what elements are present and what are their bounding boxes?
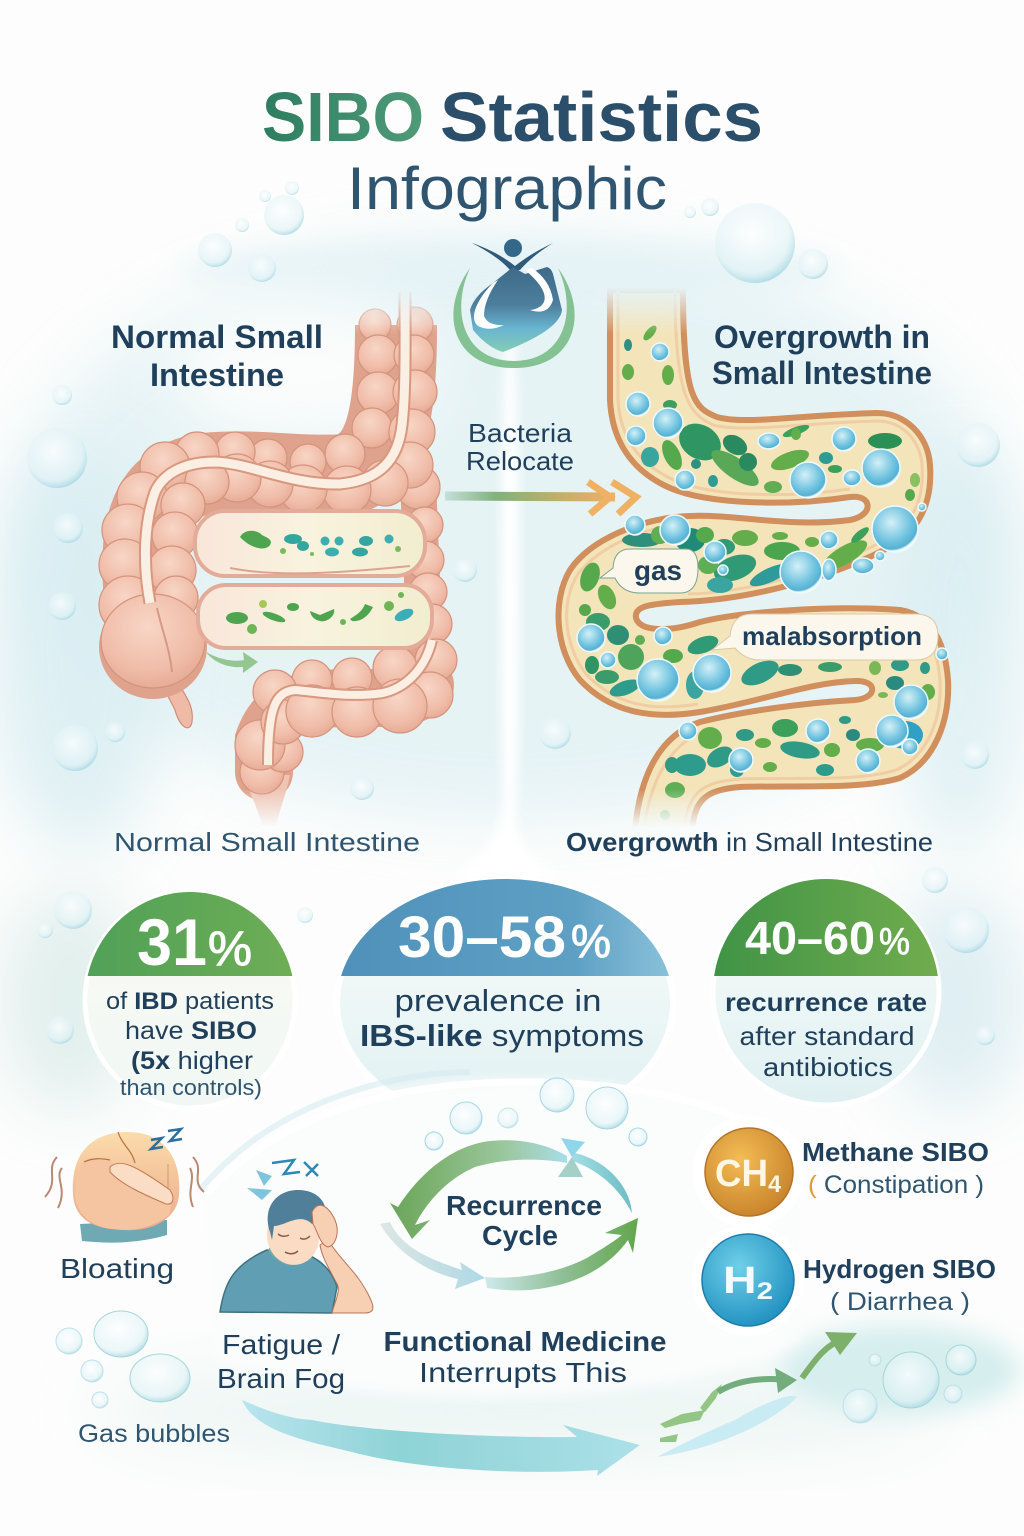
title	[262, 78, 763, 222]
methane SIBO: ( Constipation )	[808, 1171, 984, 1199]
callout: gas	[600, 549, 698, 593]
stat card: 30-58%: %	[571, 915, 611, 967]
title: SIBO	[262, 78, 424, 156]
arm	[320, 1240, 373, 1313]
stat card: 31%: (5x higher	[131, 1047, 253, 1075]
heading: overgrowth in small intestine	[712, 319, 932, 391]
stat card: 40-60%: recurrence rate	[725, 987, 927, 1017]
heading: overgrowth in small intestine: Overgrowth in	[714, 319, 930, 355]
heading: normal small intestine	[111, 319, 323, 393]
cycle label: Cycle	[482, 1220, 558, 1251]
inner lumen strip	[145, 292, 432, 765]
heading: normal small intestine: Intestine	[150, 357, 284, 393]
transverse colon segments	[99, 307, 437, 634]
arrow: bacteria relocate	[445, 418, 636, 514]
label: bloating: Bloating	[60, 1253, 174, 1284]
icon: CH4: 4	[768, 1171, 782, 1198]
methane SIBO	[693, 1116, 989, 1228]
arrow: bacteria relocate: Bacteria	[468, 418, 573, 448]
text: functional medicine	[384, 1326, 666, 1388]
illustration: normal intestine	[99, 292, 457, 826]
recurrence cycle	[380, 1138, 638, 1290]
lower arrow	[485, 1218, 638, 1290]
upper arrows	[718, 1379, 790, 1392]
icon: fatigue person	[220, 1160, 373, 1313]
bacteria in normal intestine	[226, 531, 415, 634]
inner lining	[567, 290, 940, 830]
stat card: 30-58%: 30–58	[398, 905, 566, 970]
icon: CH4: CH	[715, 1153, 770, 1195]
heading: normal small intestine: Normal Small	[111, 319, 323, 355]
cycle label	[446, 1190, 602, 1251]
tube wall	[559, 290, 948, 830]
lower panel	[200, 1072, 800, 1396]
title: Infographic	[347, 155, 667, 222]
illustration: overgrowth intestine	[559, 290, 948, 830]
caption: normal: Normal Small Intestine	[114, 827, 420, 857]
fog symbols	[247, 1170, 272, 1200]
gas bubbles in tube	[577, 343, 948, 773]
callout: malabsorption	[712, 614, 938, 660]
stat card: 31%	[80, 885, 300, 1108]
green bacteria	[576, 324, 935, 820]
cycle label: Recurrence	[446, 1190, 602, 1221]
label: fatigue	[217, 1329, 345, 1394]
icon: gas bubbles	[56, 1311, 190, 1408]
text: functional medicine: Functional Medicine	[384, 1326, 666, 1357]
icon: CH4	[693, 1116, 805, 1228]
icon: H2: 2	[757, 1278, 773, 1305]
stat card: 40-60%: antibiotics	[763, 1052, 893, 1082]
decorative bubbles	[27, 181, 1000, 1045]
arrow: bacteria relocate: Relocate	[466, 446, 574, 476]
stat card: 40-60%	[710, 875, 945, 1105]
stat card: 31%: of IBD patients	[106, 988, 274, 1015]
stat card: 31%: 31	[137, 905, 207, 979]
hand	[312, 1205, 337, 1247]
top arrow	[390, 1140, 567, 1239]
arrow: recovery growth	[657, 1332, 857, 1457]
heading: overgrowth in small intestine: Small Intestine	[712, 355, 932, 391]
bubbles lower right	[843, 1345, 976, 1423]
stat card: 40-60%: 40–60	[745, 912, 875, 964]
small intestine loops	[195, 511, 432, 648]
bubbles above cycle	[425, 1078, 647, 1150]
icon: H2: H	[723, 1260, 750, 1302]
blue streak	[657, 1396, 797, 1457]
logo	[453, 239, 575, 368]
methane SIBO: Methane SIBO	[802, 1137, 989, 1167]
stat card: 40-60%: %	[879, 921, 910, 963]
tapering end	[250, 775, 290, 823]
label: gas bubbles: Gas bubbles	[78, 1420, 230, 1448]
arrow: gut flow swoosh	[242, 1400, 640, 1476]
stat card: 31%: %	[208, 923, 252, 976]
green patches	[660, 1384, 722, 1442]
stat card: 31%: than controls)	[120, 1075, 262, 1100]
icon: bloating	[45, 1129, 204, 1243]
solid colon body	[143, 325, 426, 772]
stat card: 30-58%: IBS-like symptoms	[360, 1018, 644, 1053]
left faded arrow	[380, 1222, 485, 1289]
stat card: 40-60%: after standard	[740, 1021, 914, 1051]
hair	[268, 1190, 326, 1240]
stat card: 31%: have SIBO	[125, 1017, 257, 1045]
right arc	[570, 1153, 632, 1213]
label: fatigue: Fatigue /	[222, 1329, 340, 1360]
shirt	[220, 1250, 337, 1313]
cecum	[99, 594, 207, 728]
descending colon segments	[235, 465, 457, 794]
small green arrow	[206, 652, 258, 673]
hydrogen SIBO: ( Diarrhea )	[830, 1288, 970, 1316]
stat card: 30-58%: prevalence in	[394, 983, 602, 1018]
face	[262, 1203, 324, 1269]
icon: H2	[692, 1224, 804, 1336]
stat card: 30-58%	[340, 879, 670, 1091]
label: fatigue: Brain Fog	[217, 1363, 345, 1394]
text: functional medicine: Interrupts This	[419, 1357, 627, 1388]
hourglass	[561, 1138, 585, 1157]
title: Statistics	[440, 78, 763, 156]
hydrogen SIBO: Hydrogen SIBO	[803, 1254, 996, 1284]
caption: overgrowth: Overgrowth in Small Intestine	[566, 827, 933, 857]
hydrogen SIBO	[692, 1224, 996, 1336]
callout: gas: gas	[634, 555, 682, 586]
background watercolor wash	[0, 240, 1024, 1460]
callout: malabsorption: malabsorption	[742, 621, 922, 651]
